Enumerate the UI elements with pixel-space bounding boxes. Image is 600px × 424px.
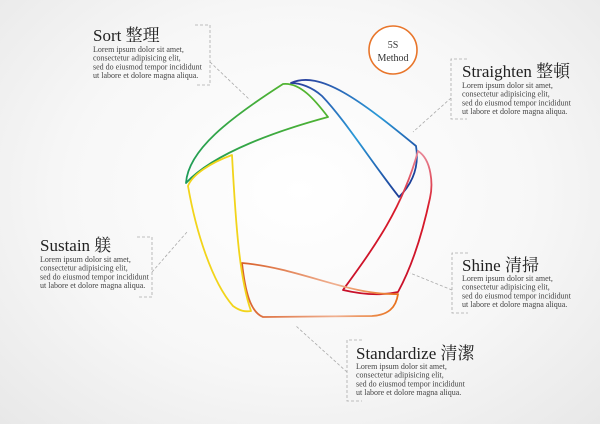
badge: 5S Method (369, 26, 417, 74)
panel: sustain: Sustain 躾 (40, 236, 111, 255)
panel: sort: consectetur adipisicing elit, (93, 54, 181, 63)
panel: straighten (413, 59, 572, 132)
panel: standardize: Lorem ipsum dolor sit amet, (356, 362, 447, 371)
badge: 5S Method: 5S (388, 40, 398, 51)
panel: sustain: sed do eiusmod tempor incididunt (40, 272, 150, 281)
panel: shine: Lorem ipsum dolor sit amet, (462, 274, 553, 283)
panel: shine: Shine 清掃 (462, 256, 539, 275)
panel: sustain: Lorem ipsum dolor sit amet, (40, 255, 131, 264)
panel: sort: ut labore et dolore magna aliqua. (93, 71, 198, 80)
panel: shine: sed do eiusmod tempor incididunt (462, 291, 572, 300)
panel: sort (93, 25, 250, 100)
pentagon diagram (186, 80, 431, 317)
panel: straighten: Straighten 整頓 (462, 61, 570, 81)
shape: yellow (sustain) (188, 155, 251, 311)
panel: straighten: Lorem ipsum dolor sit amet, (462, 81, 553, 90)
panel: straighten: ut labore et dolore magna aliqua. (462, 107, 567, 116)
panel: shine: consectetur adipisicing elit, (462, 283, 550, 292)
panel: shine (410, 253, 572, 313)
shape: green (sort) (186, 84, 328, 183)
panel: straighten: consectetur adipisicing elit, (462, 90, 550, 99)
panel: sort: Lorem ipsum dolor sit amet, (93, 45, 184, 54)
panel: standardize (296, 326, 474, 401)
shape: orange (standardize) (242, 263, 398, 317)
panel: standardize: consectetur adipisicing elit, (356, 371, 444, 380)
shape: blue (straighten) (291, 80, 417, 197)
panel: sustain: consectetur adipisicing elit, (40, 264, 128, 273)
panel: straighten: sed do eiusmod tempor incididunt (462, 98, 572, 107)
panel: sort: sed do eiusmod tempor incididunt (93, 62, 203, 71)
panel: shine: ut labore et dolore magna aliqua. (462, 300, 567, 309)
shape: red (shine) (343, 151, 431, 294)
panel: standardize: ut labore et dolore magna aliqua. (356, 388, 461, 397)
panel: standardize: sed do eiusmod tempor incididunt (356, 379, 466, 388)
panel: sort: Sort 整理 (93, 26, 160, 45)
panel: sustain (40, 232, 187, 297)
panel: standardize: Standardize 清潔 (356, 344, 474, 363)
badge: 5S Method: Method (377, 53, 409, 64)
panel: sustain: ut labore et dolore magna aliqua. (40, 281, 145, 290)
